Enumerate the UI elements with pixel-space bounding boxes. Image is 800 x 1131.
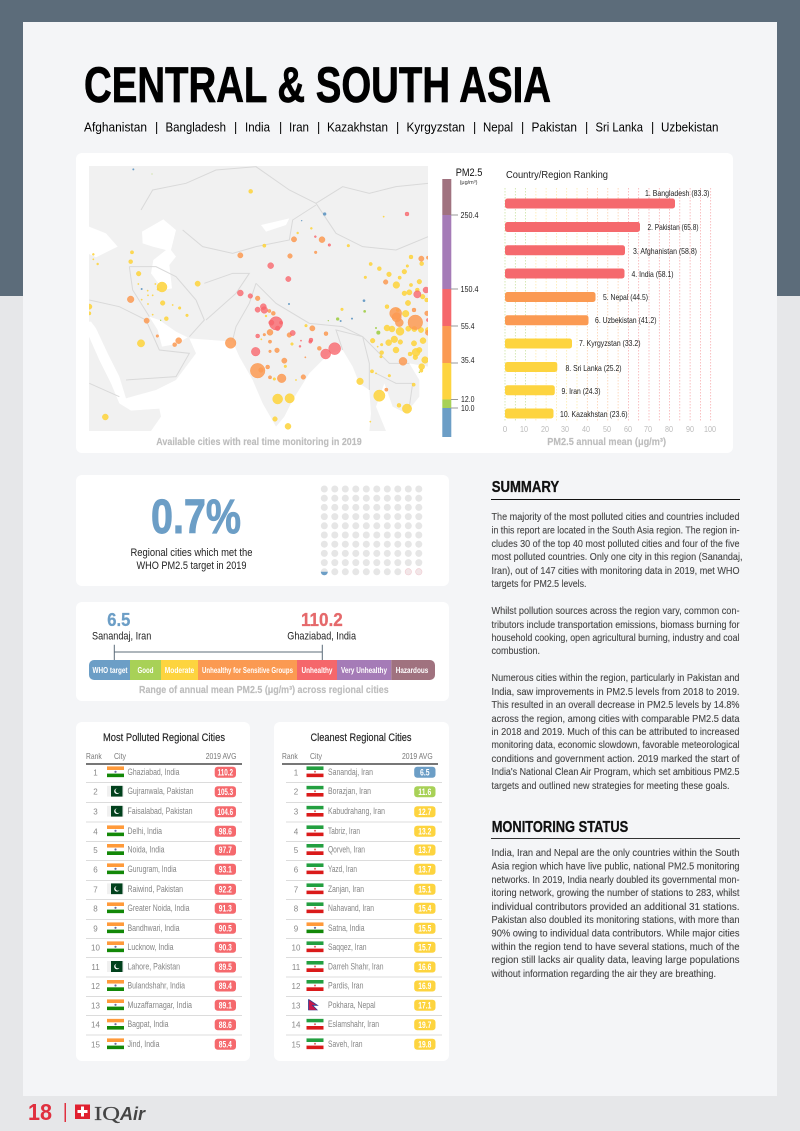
chart: country ranking: 30 — [561, 425, 569, 434]
summary paragraph 3: in 2018 and 2019. Much of this can be attributed to increased — [492, 726, 740, 738]
country list: Iran — [289, 120, 309, 134]
row 12: 12 — [292, 982, 301, 991]
row 12: Bulandshahr, India — [128, 980, 185, 990]
row 8 — [294, 902, 436, 914]
row 1: 1 — [93, 768, 98, 777]
row 11: 11 — [91, 963, 100, 972]
monitoring status text: individual contributors provided an additional 31 stations. — [492, 901, 740, 913]
waffle chart — [321, 486, 422, 575]
lowest city value — [92, 610, 151, 642]
row 3: 12.7 — [418, 807, 431, 817]
row 4: Tabriz, Iran — [328, 826, 360, 836]
country list: | — [585, 120, 588, 134]
row 8: Greater Noida, India — [128, 903, 190, 913]
row 9: Bandhwari, India — [128, 923, 180, 933]
AQI category bar: Very Unhealthy — [341, 666, 387, 675]
country list: Sri Lanka — [596, 120, 643, 134]
PM2.5 colour scale legend — [442, 167, 482, 437]
row 10: 90.3 — [219, 942, 232, 952]
table title: Cleanest Regional Cities — [310, 732, 412, 744]
row 4: 13.2 — [418, 826, 431, 836]
row 10 — [91, 941, 236, 953]
row 9: 15.5 — [418, 923, 431, 933]
row 5 — [294, 844, 436, 856]
row 3: 3 — [294, 808, 299, 817]
monitoring status text: without information regarding the air they are breathing. — [491, 968, 716, 980]
PM2.5 colour scale legend: (μg/m³) — [460, 180, 478, 186]
lowest city value: 6.5 — [107, 610, 130, 630]
row 7: 15.1 — [418, 884, 431, 894]
chart: country ranking: 9. Iran (24.3) — [562, 386, 601, 396]
row 5: 13.7 — [418, 845, 431, 855]
row 9: 9 — [93, 924, 98, 933]
row 1: 6.5 — [420, 767, 430, 777]
highest city value — [287, 610, 357, 642]
row 3: Faisalabad, Pakistan — [128, 806, 192, 816]
summary paragraph 2: Whilst pollution sources across the region vary, common con- — [492, 605, 740, 617]
row 12 — [292, 980, 436, 992]
row 12: 16.9 — [418, 981, 431, 991]
country list: | — [234, 120, 237, 134]
row 8: 91.3 — [219, 903, 232, 913]
chart: country ranking: 70 — [644, 425, 652, 434]
row 15 — [91, 1038, 236, 1050]
row 4 — [93, 825, 236, 837]
row 15: 15 — [292, 1040, 301, 1049]
country list: | — [473, 120, 476, 134]
page number: 18 — [28, 1099, 52, 1125]
country list: Uzbekistan — [661, 120, 719, 134]
country list — [84, 120, 719, 134]
row 4: 4 — [93, 827, 98, 836]
row 2 — [294, 786, 436, 797]
chart: country ranking: 10. Kazakhstan (23.6) — [560, 409, 628, 419]
icon: IQAir logo: Air — [119, 1104, 146, 1124]
country list: Kyrgyzstan — [406, 120, 465, 134]
panel: range of annual mean — [76, 602, 449, 701]
country list: India — [245, 120, 270, 134]
row 8: 15.4 — [418, 903, 431, 913]
row 4 — [294, 825, 436, 837]
row 9 — [93, 922, 236, 934]
row 15: Saveh, Iran — [328, 1039, 362, 1049]
table header — [86, 751, 236, 761]
row 5: 5 — [294, 846, 299, 855]
row 14: 19.7 — [418, 1020, 431, 1030]
PM2.5 colour scale legend: 55.4 — [461, 322, 475, 331]
row 1 — [294, 766, 436, 778]
panel: map and ranking card — [76, 153, 733, 453]
big percentage: 0.7% — [151, 491, 241, 544]
row 5: 97.7 — [219, 845, 232, 855]
AQI category bar: Hazardous — [396, 666, 429, 675]
country list: | — [396, 120, 399, 134]
summary paragraph 3: India's National Clean Air Program, which set ambitious PM2.5 — [492, 766, 740, 778]
panel: WHO target stat — [76, 475, 449, 586]
country list: | — [155, 120, 158, 134]
table header: City — [114, 751, 127, 761]
chart: country ranking: 6. Uzbekistan (41.2) — [595, 315, 657, 325]
row 6: Yazd, Iran — [328, 864, 357, 874]
row 11: 11 — [292, 963, 301, 972]
summary paragraph 1: cludes 30 of the top 40 most polluted cities and four of the five — [492, 538, 740, 550]
chart: country ranking: 80 — [665, 425, 673, 434]
monitoring status text: networks. In 2019, India nearly doubled its governmental mon- — [492, 874, 740, 886]
lowest city value: Sanandaj, Iran — [92, 630, 151, 642]
map caption: Available cities with real time monitoring in 2019 — [156, 436, 362, 448]
title: CENTRAL & SOUTH ASIA — [84, 57, 551, 113]
row 9 — [294, 922, 436, 934]
AQI category bar: Unhealthy — [302, 666, 333, 675]
row 3 — [294, 806, 436, 817]
row 9: 90.5 — [219, 923, 232, 933]
row 11 — [91, 961, 236, 972]
AQI category bar — [89, 660, 435, 680]
row 11: 16.6 — [418, 962, 431, 972]
row 3: 104.6 — [218, 807, 233, 817]
PM2.5 colour scale legend: 12.0 — [461, 395, 475, 404]
summary paragraph 3 — [492, 672, 740, 792]
row 7: Zanjan, Iran — [328, 884, 364, 894]
row 13: Muzaffarnagar, India — [128, 1000, 192, 1010]
row 12: Pardis, Iran — [328, 980, 364, 990]
map of monitored cities — [87, 166, 431, 431]
country list: Afghanistan — [84, 120, 147, 134]
row 8: 8 — [294, 904, 299, 913]
row 6: 93.1 — [219, 864, 232, 874]
row 5: Noida, India — [128, 844, 164, 854]
chart: country ranking: 20 — [541, 425, 549, 434]
row 3 — [93, 806, 236, 817]
row 13 — [91, 999, 236, 1011]
chart: country ranking: 100 — [704, 425, 716, 434]
summary paragraph 1: most polluted countries. Only one city in this region (Sanandaj, — [492, 551, 742, 563]
row 13: 89.1 — [219, 1000, 232, 1010]
highest city value: 110.2 — [301, 610, 343, 630]
chart: country ranking: 1. Bangladesh (83.3) — [645, 188, 710, 198]
row 12: 12 — [91, 982, 100, 991]
country list: Bangladesh — [166, 120, 226, 134]
row 10: 10 — [292, 943, 301, 952]
row 14: 88.6 — [219, 1020, 232, 1030]
monitoring status text — [491, 847, 740, 980]
row 7: 92.2 — [219, 884, 232, 894]
row 14: Bagpat, India — [128, 1019, 168, 1029]
summary paragraph 3: India, saw improvements in PM2.5 levels from 2018 to 2019. — [492, 686, 740, 698]
row 8 — [93, 902, 236, 914]
row 2: 2 — [93, 788, 98, 797]
row 3: 3 — [93, 808, 98, 817]
chart: country ranking: 4. India (58.1) — [632, 269, 674, 279]
summary paragraph 2: combustion. — [492, 645, 540, 657]
summary paragraph 3: This resulted in an overall decrease in PM2.5 levels by 14.8% — [492, 699, 740, 711]
AQI category bar: WHO target — [92, 666, 128, 675]
row 13 — [292, 999, 436, 1011]
monitoring status text: within the region tend to have several stations, much of the — [491, 941, 740, 953]
monitoring status text: Asia region which have live public, national PM2.5 monitoring — [492, 860, 740, 872]
summary paragraph 1: The majority of the most polluted cities and countries included — [492, 511, 740, 523]
row 13: 13 — [292, 1001, 301, 1010]
heading: monitoring status: MONITORING STATUS — [492, 819, 628, 836]
row 14 — [91, 1019, 236, 1030]
panel: most polluted cities table — [76, 722, 250, 1061]
highest city value: Ghaziabad, India — [287, 630, 357, 642]
row 11: 89.5 — [219, 962, 232, 972]
monitoring status text: Pakistan also doubled its monitoring stations, with more than — [492, 914, 740, 926]
chart: country ranking — [503, 169, 716, 448]
row 13: Pokhara, Nepal — [328, 1000, 376, 1010]
row 7: 7 — [93, 885, 98, 894]
AQI category bar: Moderate — [165, 666, 195, 675]
table header — [282, 751, 433, 761]
row 2: 11.6 — [418, 787, 431, 797]
chart: country ranking: 40 — [582, 425, 590, 434]
monitoring status text: India, Iran and Nepal are the only countries within the South — [492, 847, 740, 859]
row 10: Lucknow, India — [128, 942, 174, 952]
row 6: 6 — [93, 865, 98, 874]
table header: 2019 AVG — [402, 751, 433, 761]
icon: IQAir logo: IQ — [94, 1103, 121, 1125]
summary paragraph 3: conditions and government action. 2019 marked the start of — [492, 753, 740, 765]
row 15: 15 — [91, 1040, 100, 1049]
row 13: 17.1 — [418, 1000, 431, 1010]
country list: | — [651, 120, 654, 134]
row 8: 8 — [93, 904, 98, 913]
row 2: 2 — [294, 788, 299, 797]
summary paragraph 1: in this report are located in the South Asia region. The region in- — [492, 524, 740, 536]
row 2: 105.3 — [218, 787, 233, 797]
row 6 — [294, 863, 436, 875]
table header: 2019 AVG — [206, 751, 236, 761]
row 14 — [292, 1019, 436, 1030]
row 4: 4 — [294, 827, 299, 836]
row 6 — [93, 863, 236, 875]
row 2: Borazjan, Iran — [328, 786, 371, 796]
stat description — [130, 547, 252, 572]
range caption: Range of annual mean PM2.5 (μg/m³) across regional cities — [139, 684, 389, 696]
country list: Nepal — [483, 120, 513, 134]
row 14: 14 — [91, 1021, 100, 1030]
summary paragraph 1 — [492, 511, 742, 590]
chart: country ranking: 0 — [503, 425, 508, 434]
row 10 — [292, 941, 436, 953]
summary paragraph 3: monitoring data, economic slowdown, favorable meteorological — [492, 739, 740, 751]
chart: country ranking: 50 — [603, 425, 611, 434]
AQI category bar: Good — [138, 666, 154, 675]
row 5: Qorveh, Iran — [328, 844, 365, 854]
country list: | — [521, 120, 524, 134]
row 9: 9 — [294, 924, 299, 933]
row 9: Satna, India — [328, 923, 364, 933]
row 4: Delhi, India — [128, 826, 162, 836]
row 14: Eslamshahr, Iran — [328, 1019, 379, 1029]
PM2.5 colour scale legend: PM2.5 — [456, 167, 482, 179]
row 7: 7 — [294, 885, 299, 894]
row 13: 13 — [91, 1001, 100, 1010]
row 11: Darreh Shahr, Iran — [328, 962, 384, 972]
summary paragraph 2: household cooking, open agricultural burning, industry and coal — [492, 632, 740, 644]
row 15: Jind, India — [128, 1039, 160, 1049]
chart: country ranking: 60 — [624, 425, 632, 434]
summary paragraph 2: tributors include transportation emissions, biomass burning for — [492, 619, 740, 631]
PM2.5 colour scale legend: 150.4 — [460, 285, 479, 294]
row 1: Sanandaj, Iran — [328, 767, 373, 777]
PM2.5 colour scale legend: 250.4 — [460, 211, 479, 220]
row 7: Raiwind, Pakistan — [128, 884, 183, 894]
chart: country ranking: 8. Sri Lanka (25.2) — [566, 363, 622, 373]
row 6: 6 — [294, 865, 299, 874]
row 3: Kabudrahang, Iran — [328, 806, 385, 816]
row 4: 98.6 — [219, 826, 232, 836]
row 6: Gurugram, India — [128, 864, 176, 874]
table header: Rank — [282, 751, 298, 761]
chart title: Country/Region Ranking — [506, 169, 608, 181]
heading: summary: SUMMARY — [492, 479, 559, 496]
row 1: 110.2 — [218, 767, 233, 777]
row 1 — [93, 766, 236, 778]
country list: | — [279, 120, 282, 134]
PM2.5 colour scale legend: 10.0 — [461, 404, 475, 413]
row 12: 89.4 — [219, 981, 232, 991]
chart axis caption: PM2.5 annual mean (μg/m³) — [547, 436, 666, 448]
table title: Most Polluted Regional Cities — [103, 732, 225, 744]
footer — [28, 1099, 146, 1125]
row 2 — [93, 786, 236, 797]
row 6: 13.7 — [418, 864, 431, 874]
row 12 — [91, 980, 236, 992]
monitoring status text: 90% owing to individual data contributors. While major cities — [492, 928, 740, 940]
chart: country ranking: 10 — [520, 425, 528, 434]
row 5: 5 — [93, 846, 98, 855]
panel: cleanest cities table — [274, 722, 449, 1061]
row 11: Lahore, Pakistan — [128, 962, 180, 972]
row 1: 1 — [294, 768, 299, 777]
table header: City — [310, 751, 323, 761]
chart: country ranking: 7. Kyrgyzstan (33.2) — [579, 338, 641, 348]
chart: country ranking: 2. Pakistan (65.8) — [648, 222, 699, 232]
row 5 — [93, 844, 236, 856]
row 11 — [292, 961, 436, 972]
row 7 — [294, 883, 436, 895]
summary paragraph 1: targets for PM2.5 levels. — [492, 578, 586, 590]
summary paragraph 1: Iran), out of 147 cities with monitoring data in 2019, met WHO — [492, 565, 740, 577]
chart: country ranking: 3. Afghanistan (58.8) — [633, 246, 697, 256]
row 7 — [93, 883, 236, 895]
table header: Rank — [86, 751, 102, 761]
summary paragraph 3: across the region, among cities with comparable PM2.5 data — [492, 713, 740, 725]
PM2.5 colour scale legend: 35.4 — [461, 356, 475, 365]
row 10: Saqqez, Iran — [328, 942, 366, 952]
AQI category bar: Unhealthy for Sensitive Groups — [202, 666, 293, 675]
row 15 — [292, 1038, 436, 1050]
stat description: Regional cities which met the — [130, 547, 252, 559]
row 8: Nahavand, Iran — [328, 903, 374, 913]
monitoring status text: itoring network, growing the number of stations to 283, whilst — [492, 887, 740, 899]
summary paragraph 3: Numerous cities within the region, particularly in Pakistan and — [492, 672, 740, 684]
row 15: 85.4 — [219, 1040, 232, 1050]
icon: IQAir logo — [75, 1103, 146, 1125]
row 10: 10 — [91, 943, 100, 952]
stat description: WHO PM2.5 target in 2019 — [136, 560, 246, 572]
chart: country ranking: 5. Nepal (44.5) — [603, 292, 648, 302]
monitoring status text: region still lacks air quality data, leaving large populations — [492, 954, 740, 966]
summary paragraph 2 — [492, 605, 740, 657]
row 14: 14 — [292, 1021, 301, 1030]
row 10: 15.7 — [418, 942, 431, 952]
row 15: 19.8 — [418, 1040, 431, 1050]
row 1: Ghaziabad, India — [128, 767, 180, 777]
country list: | — [317, 120, 320, 134]
row 2: Gujranwala, Pakistan — [128, 786, 194, 796]
country list: Kazakhstan — [327, 120, 388, 134]
summary paragraph 3: targets and outlined new strategies for meeting these goals. — [492, 780, 730, 792]
chart: country ranking: 90 — [686, 425, 694, 434]
country list: Pakistan — [532, 120, 577, 134]
